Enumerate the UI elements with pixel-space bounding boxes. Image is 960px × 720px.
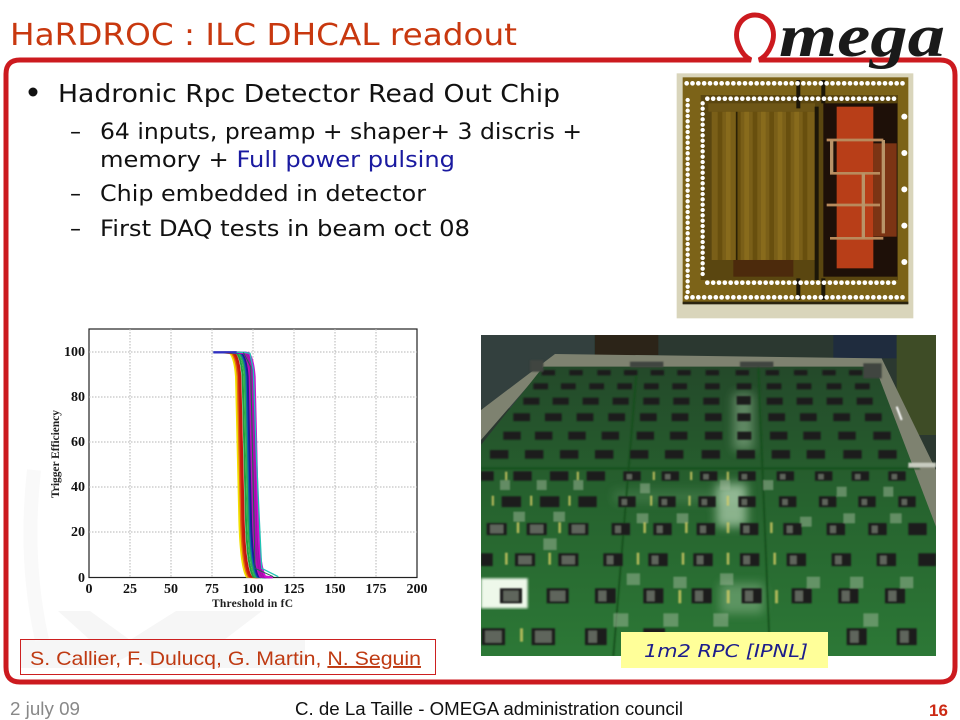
chip photograph	[677, 73, 913, 318]
title: HaRDROC : ILC DHCAL readout	[10, 18, 517, 53]
sub bullet: DAQ tests: First DAQ tests in beam oct 08	[100, 217, 470, 242]
sub bullet: inputs	[70, 120, 582, 173]
photo caption: 1m2 RPC [IPNL]	[644, 641, 808, 662]
plot area	[89, 329, 417, 578]
axis tick labels: 0	[78, 571, 85, 586]
sub bullet: embedded: Chip embedded in detector	[100, 182, 427, 207]
axis tick labels	[64, 345, 428, 597]
axis tick labels: 200	[406, 582, 428, 597]
page number: 16	[929, 701, 948, 720]
board markings	[500, 480, 913, 627]
footer date: 2 july 09	[10, 699, 80, 719]
footer presenter: C. de La Taille - OMEGA administration council	[295, 699, 683, 719]
axis tick labels: 40	[71, 480, 85, 495]
sub bullet: inputs: memory + Full power pulsing	[100, 148, 455, 173]
authors credit box	[20, 640, 436, 674]
chips rows	[481, 370, 936, 645]
bullet list	[28, 79, 582, 242]
trigger efficiency chart	[50, 329, 428, 610]
yellow marks	[492, 472, 778, 642]
sub bullet: DAQ tests: –	[70, 217, 81, 242]
RPC detector photograph	[481, 335, 936, 656]
axis tick labels: 20	[71, 525, 85, 540]
axis tick labels: 125	[284, 582, 304, 597]
y axis label: Trigger Efficiency	[50, 410, 62, 498]
photo caption	[621, 632, 828, 668]
axis tick labels: 0	[86, 582, 92, 597]
axis tick labels: 50	[164, 582, 178, 597]
sub bullet: inputs: –	[70, 120, 81, 145]
axis tick labels: 150	[324, 582, 346, 597]
axis tick labels: 175	[366, 582, 386, 597]
axis tick labels: 75	[205, 582, 219, 597]
axis tick labels: 60	[71, 435, 85, 450]
sub bullet: inputs: 64 inputs, preamp + shaper+ 3 discris +	[100, 120, 582, 145]
axis tick labels: 80	[71, 390, 85, 405]
main bullet: Hadronic Rpc Detector Read Out Chip	[58, 79, 560, 108]
x axis label: Threshold in fC	[212, 598, 293, 610]
axis tick labels: 100	[64, 345, 85, 360]
authors credit box: S. Callier, F. Dulucq, G. Martin, N. Seguin	[30, 648, 421, 670]
logo wordmark: mega	[779, 3, 945, 69]
chip highlights	[485, 474, 909, 643]
axis tick labels: 25	[123, 582, 137, 597]
sub bullet: embedded: –	[70, 182, 81, 207]
efficiency curves	[213, 352, 278, 577]
axis tick labels: 100	[242, 582, 264, 597]
watermark	[20, 470, 305, 668]
